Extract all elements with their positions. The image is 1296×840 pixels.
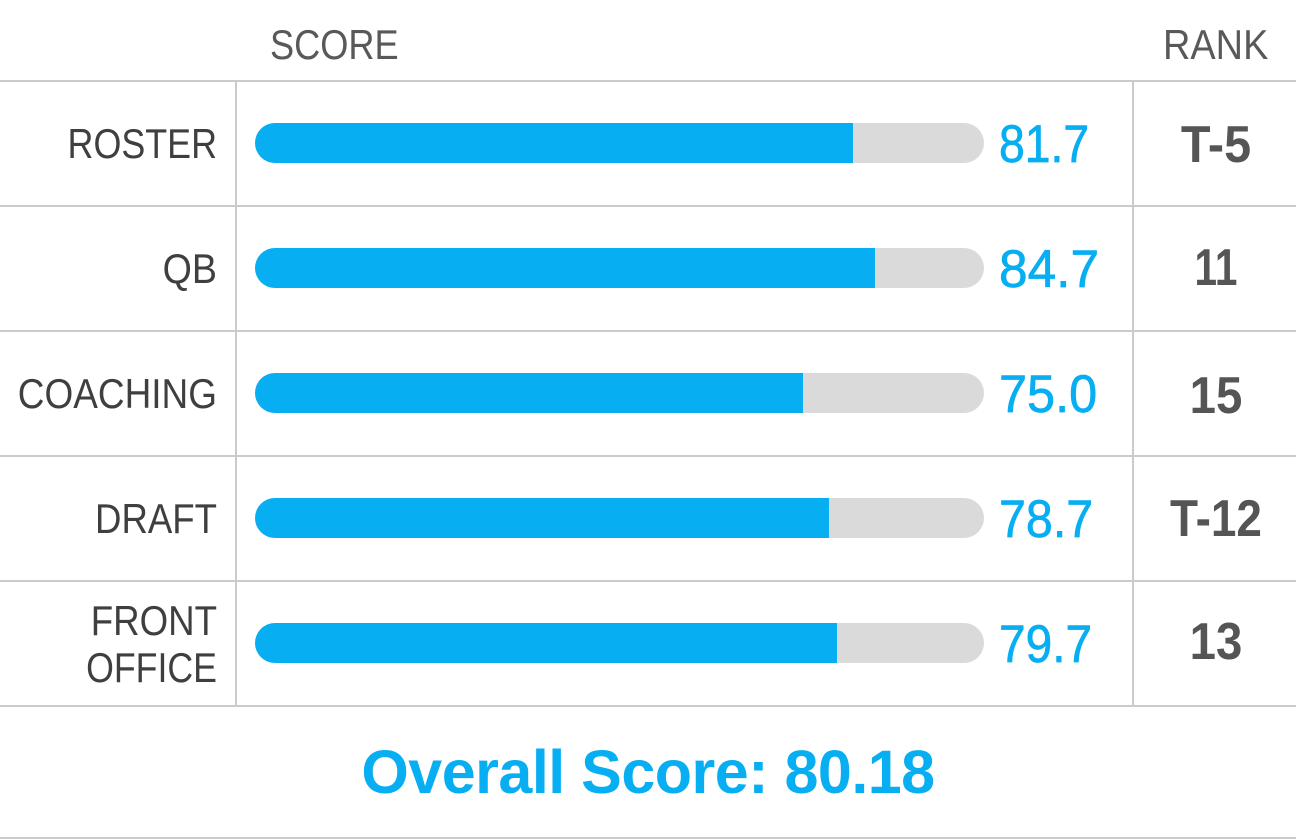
value: front office score: 79.7 <box>999 615 1092 674</box>
bar: QB score <box>255 248 984 288</box>
row label: front office: FRONT <box>91 597 217 644</box>
value: coaching score: 75.0 <box>999 365 1097 424</box>
row label: draft: DRAFT <box>95 495 217 542</box>
rank: front office: 13 <box>1190 613 1242 671</box>
bar: roster score <box>255 123 984 163</box>
rank: QB: 11 <box>1195 239 1237 297</box>
heading: score column: SCORE <box>270 21 399 68</box>
row label: front office: OFFICE <box>86 644 217 691</box>
rank: coaching: 15 <box>1190 367 1242 425</box>
row label: front office <box>86 597 217 691</box>
heading: rank column: RANK <box>1163 21 1268 68</box>
rank: draft: T-12 <box>1170 490 1262 548</box>
value: draft score: 78.7 <box>999 490 1093 549</box>
bar: coaching score <box>255 373 984 413</box>
value: roster score: 81.7 <box>999 115 1089 174</box>
value: QB score: 84.7 <box>999 240 1099 299</box>
bar: front office score <box>255 623 984 663</box>
row label: roster: ROSTER <box>68 120 217 167</box>
rank: roster: T-5 <box>1181 116 1251 174</box>
overall score: Overall Score: 80.18 <box>361 738 935 806</box>
row label: coaching: COACHING <box>18 370 217 417</box>
bar: draft score <box>255 498 984 538</box>
row label: QB: QB <box>163 245 217 292</box>
